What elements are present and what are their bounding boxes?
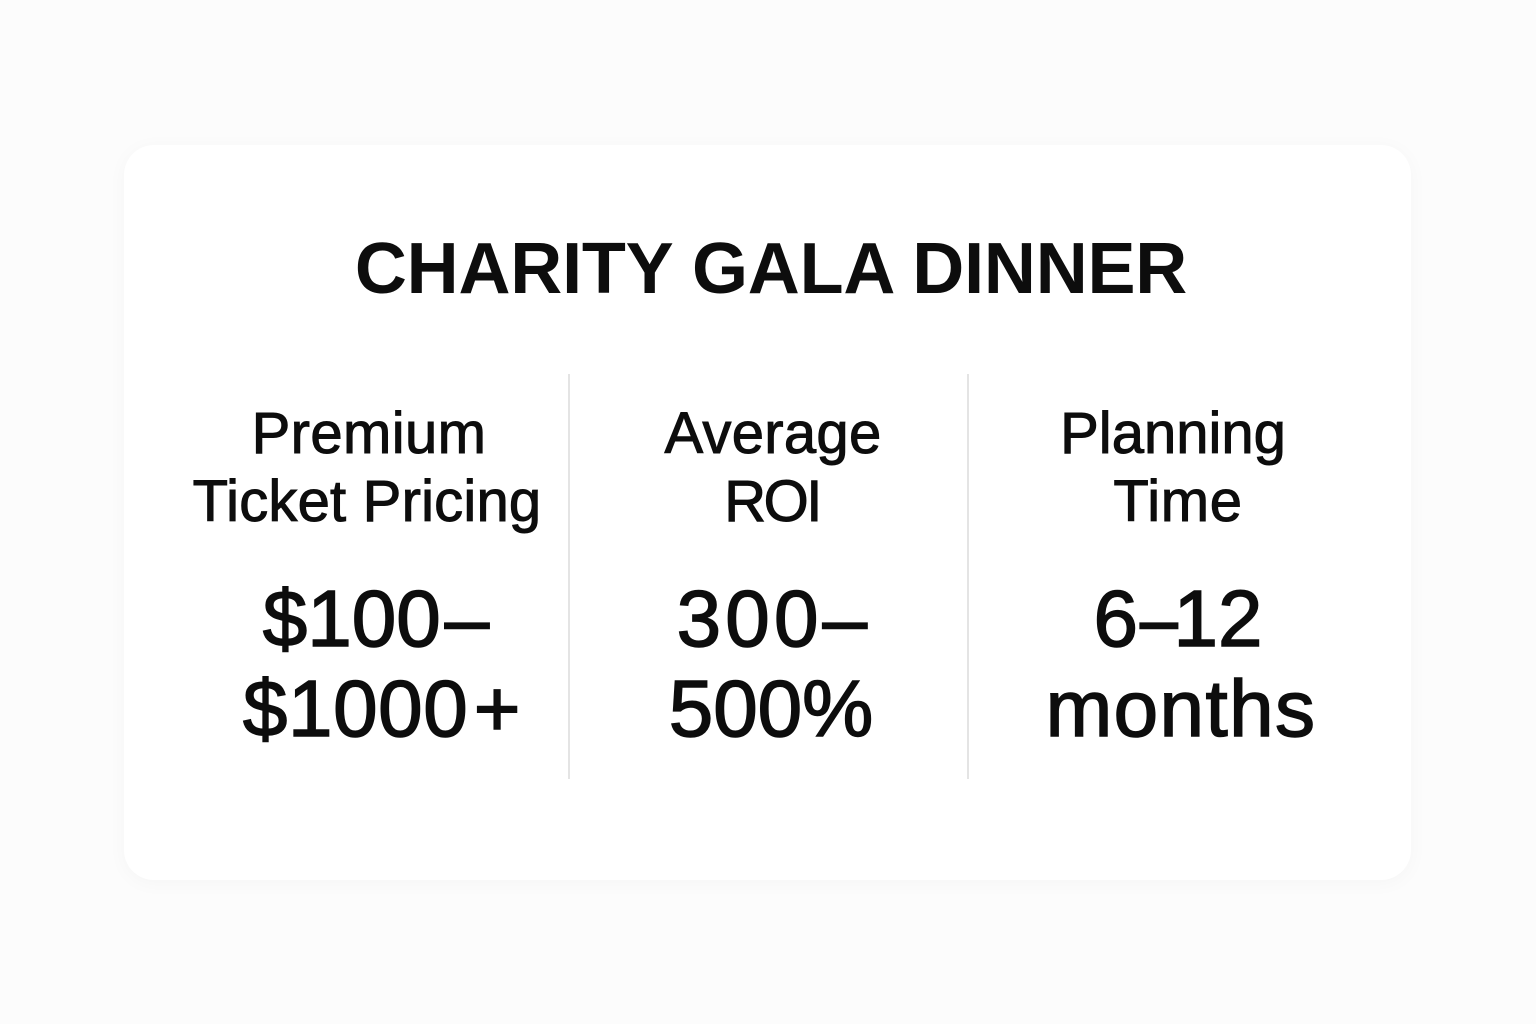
divider left bbox=[568, 374, 570, 779]
column 3 value: months: 6 12 bbox=[1094, 574, 1262, 663]
column 1 label: Premium Ticket Pricing: Ticket Pricing bbox=[193, 469, 541, 534]
divider right bbox=[967, 374, 969, 779]
column 3 label: Planning Time: Time bbox=[1113, 469, 1243, 534]
column 2 value: ROI range: 500% bbox=[669, 664, 873, 753]
column 3 value: months: – bbox=[1140, 574, 1178, 663]
column 3 value: months: months bbox=[1046, 664, 1316, 753]
column 2 label: Average ROI bbox=[664, 401, 882, 534]
column 2 value: ROI range bbox=[669, 574, 873, 753]
column 1 value: price range bbox=[242, 574, 521, 753]
title: CHARITY GALA DINNER bbox=[355, 229, 1187, 309]
panel: main card bbox=[124, 145, 1411, 880]
column 1 label: Premium Ticket Pricing bbox=[193, 401, 541, 534]
column 3 label: Planning Time: Planning bbox=[1060, 401, 1286, 466]
column 1 value: price range: $1000+ bbox=[243, 664, 521, 753]
column 3 label: Planning Time bbox=[1060, 401, 1286, 534]
column 3 value: months bbox=[1046, 574, 1316, 753]
column 2 label: Average ROI: Average bbox=[664, 401, 882, 466]
column 1 value: price range: $100– bbox=[263, 574, 489, 663]
column 1 label: Premium Ticket Pricing: Premium bbox=[252, 401, 486, 466]
column 2 label: Average ROI: ROI bbox=[724, 469, 820, 534]
column 2 value: ROI range: 300– bbox=[677, 574, 871, 663]
